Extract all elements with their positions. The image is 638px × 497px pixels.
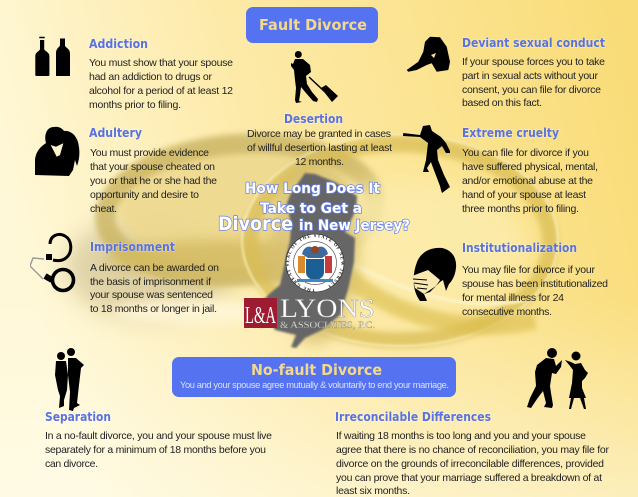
panel: irreconcilable differences: Irreconcilable Differences (335, 409, 491, 424)
panel: deviant sexual conduct: If your spouse forces you to take (462, 56, 605, 68)
panel: deviant sexual conduct: consent, you can file for divorce (462, 84, 601, 96)
title: How Long Does It Take to Get a Divorce in New Jersey?: Take to Get a (260, 201, 362, 217)
panel: separation: can divorce. (45, 458, 98, 470)
panel: extreme cruelty: have suffered physical, mental, (462, 161, 598, 173)
panel: imprisonment: the basis of imprisonment if (90, 276, 211, 288)
panel: institutionalization: for mental illness for 24 (462, 292, 564, 304)
icon: person covering face (412, 248, 456, 301)
panel: imprisonment: Imprisonment (90, 239, 175, 254)
icon: figure pushing forward (403, 125, 450, 193)
panel: addiction (35, 36, 233, 111)
panel: separation: Separation (45, 409, 111, 424)
icon: state seal: THE GREAT SEAL OF THE STATE OF NEW JERSEY (286, 234, 344, 292)
panel: extreme cruelty: Extreme cruelty (462, 125, 559, 140)
logo: Lyons and Associates: LYONS (280, 294, 375, 323)
panel: adultery: You must provide evidence (90, 147, 209, 159)
panel: addiction: Addiction (89, 36, 148, 51)
panel: institutionalization: spouse has been institutionalized (462, 278, 608, 290)
panel: deviant sexual conduct: Deviant sexual conduct (462, 35, 605, 50)
panel: deviant sexual conduct (407, 35, 605, 109)
panel: irreconcilable differences: divorce on the grounds of irreconcilable differences, provided (336, 458, 604, 470)
heading pill: Fault Divorce (246, 7, 378, 43)
panel: adultery: that your spouse cheated on (90, 161, 215, 173)
title: How Long Does It Take to Get a Divorce in New Jersey? (218, 181, 410, 235)
icon: handcuffs (30, 234, 74, 290)
panel: deviant sexual conduct: based on this fact. (462, 97, 542, 109)
panel: adultery: Adultery (89, 125, 142, 140)
panel: irreconcilable differences (335, 348, 610, 497)
panel: imprisonment: A divorce can be awarded on (90, 262, 219, 274)
logo: Lyons and Associates: & ASSOCIATES, P.C. (280, 320, 375, 330)
panel: adultery: opportunity and desire to (90, 189, 199, 201)
panel: institutionalization (412, 240, 608, 318)
panel: irreconcilable differences: you can prove that your marriage suffered a breakdown of at (336, 472, 602, 484)
panel: extreme cruelty (403, 125, 598, 215)
icon: arguing couple (527, 348, 588, 409)
panel: imprisonment: to 18 months or longer in jail. (90, 303, 217, 315)
logo: Lyons and Associates: L&A (245, 303, 276, 329)
panel: imprisonment (30, 234, 219, 315)
panel: irreconcilable differences: If waiting 18 months is too long and you and your spouse (336, 430, 586, 442)
panel: desertion (247, 51, 392, 168)
title: How Long Does It Take to Get a Divorce in New Jersey?: How Long Does It (245, 181, 380, 197)
logo: Lyons and Associates (244, 294, 375, 330)
panel: adultery: you or that he or she had the (90, 175, 217, 187)
panel: institutionalization: You may file for divorce if your (462, 264, 596, 276)
panel: deviant sexual conduct: part in sexual acts without your (462, 70, 598, 82)
icon: couple standing apart (55, 348, 84, 411)
panel: adultery: cheat. (90, 203, 117, 215)
panel: addiction: You must show that your spouse (89, 57, 233, 69)
panel: institutionalization: consecutive months. (462, 306, 552, 318)
panel: separation (45, 348, 272, 470)
icon: bottles (35, 37, 70, 76)
panel: extreme cruelty: three months prior to filing. (462, 203, 579, 215)
panel: irreconcilable differences: agree that there is no chance of reconciliation, you may file for (336, 444, 610, 456)
New Jersey silhouette (260, 173, 357, 348)
panel: irreconcilable differences: least six months. (336, 485, 410, 497)
panel: institutionalization: Institutionalization (462, 240, 577, 255)
panel: addiction: had an addiction to drugs or (89, 71, 212, 83)
panel: addiction: alcohol for a period of at least 12 (89, 85, 233, 97)
icon: person walking with suitcase (291, 51, 338, 103)
title: How Long Does It Take to Get a Divorce in New Jersey?: in New Jersey? (299, 218, 410, 234)
heading pill: No-fault Divorce (172, 357, 456, 397)
panel: adultery (35, 125, 217, 215)
panel: desertion: of willful desertion lasting at least (247, 142, 392, 154)
heading pill: No-fault Divorce: No-fault Divorce (251, 361, 382, 379)
panel: desertion: Divorce may be granted in cases (247, 128, 391, 140)
panel: desertion: Desertion (284, 111, 343, 126)
panel: separation: separately for a minimum of 18 months before you (45, 444, 266, 456)
panel: extreme cruelty: You can file for divorce if you (462, 147, 589, 159)
panel: addiction: months prior to filing. (89, 99, 181, 111)
panel: imprisonment: your spouse was sentenced (90, 289, 213, 301)
panel: extreme cruelty: and/or emotional abuse at the (462, 175, 593, 187)
heading pill: No-fault Divorce: You and your spouse agree mutually & voluntarily to end your marriage. (180, 380, 449, 390)
panel: desertion: 12 months. (295, 156, 344, 168)
icon: person sitting with head on knees (407, 37, 450, 72)
title: How Long Does It Take to Get a Divorce in New Jersey?: Divorce (218, 213, 293, 235)
icon: embracing couple (35, 127, 79, 176)
heading pill: Fault Divorce: Fault Divorce (259, 16, 367, 34)
panel: extreme cruelty: hand of your spouse at least (462, 189, 586, 201)
panel: separation: In a no-fault divorce, you and your spouse must live (45, 430, 272, 442)
